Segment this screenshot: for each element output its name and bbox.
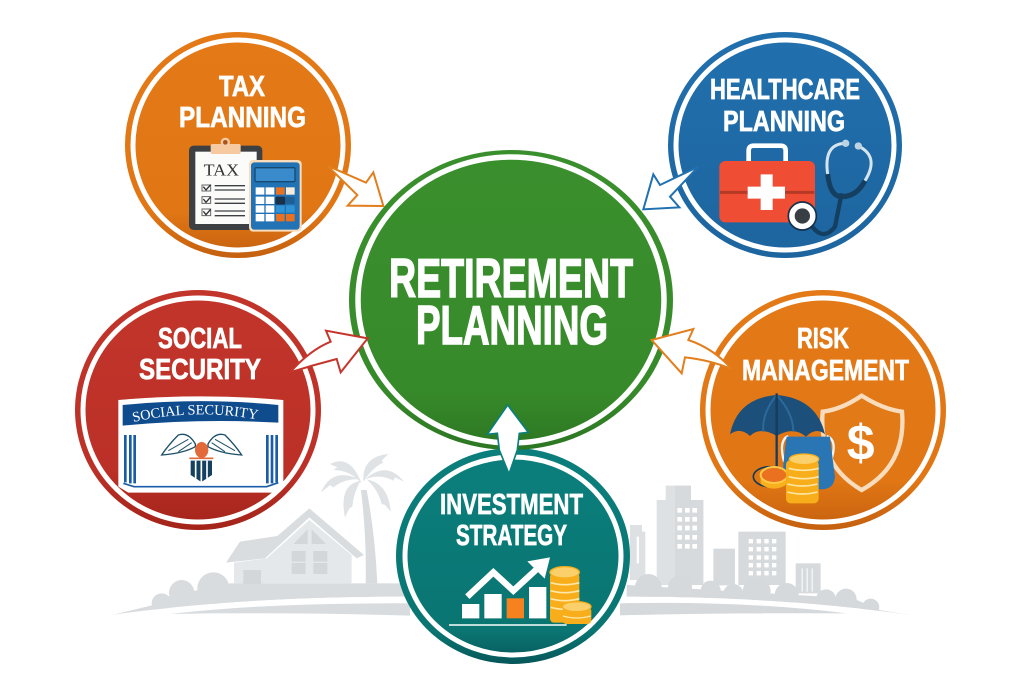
- icon: clipboard and calculator: TAX: [204, 160, 239, 179]
- investment heading: INVESTMENT: [440, 489, 583, 521]
- healthcare heading: HEALTHCARE: [710, 74, 860, 106]
- infographic canvas: [75, 32, 946, 664]
- tax heading: TAX: [219, 71, 266, 103]
- buildings: [630, 486, 821, 593]
- icon: first aid kit and stethoscope: [719, 140, 871, 234]
- investment circle: [396, 448, 630, 664]
- house: [226, 508, 364, 584]
- risk heading: MANAGEMENT: [742, 355, 909, 387]
- arrow: social security to center: [290, 331, 368, 372]
- background: house, palm and hills: [112, 454, 410, 616]
- investment heading: STRATEGY: [456, 520, 567, 552]
- central heading: RETIREMENT: [389, 247, 633, 309]
- investment heading: [440, 489, 583, 552]
- panel: healthcare planning: [668, 32, 902, 258]
- panel: investment strategy: [396, 448, 630, 664]
- panel: social security: [75, 290, 321, 530]
- icon: growth chart and coins: [449, 557, 591, 625]
- palm tree: [321, 454, 404, 583]
- background: city skyline: [620, 486, 909, 617]
- arrow: tax to center: [327, 166, 383, 206]
- risk heading: [742, 323, 909, 387]
- central heading: PLANNING: [416, 294, 608, 356]
- icon: social security card: [118, 396, 284, 493]
- arrow: investment to center: [487, 405, 528, 474]
- healthcare heading: PLANNING: [723, 106, 845, 138]
- arrow: healthcare to center: [643, 167, 698, 209]
- building windows: [637, 508, 813, 592]
- healthcare circle: [668, 32, 902, 258]
- arrow: risk management to center: [652, 329, 732, 373]
- tax circle: [125, 32, 351, 258]
- tax heading: [179, 71, 306, 134]
- healthcare heading: [710, 74, 860, 138]
- hills and ground left: [112, 572, 410, 616]
- risk heading: RISK: [797, 323, 849, 355]
- panel: tax planning: [125, 32, 351, 258]
- icon: social security card: SOCIAL SECURITY: [132, 404, 259, 422]
- central circle: [349, 150, 673, 450]
- social security heading: SECURITY: [139, 354, 261, 386]
- social security circle: [75, 290, 321, 530]
- hills and ground right: [620, 574, 909, 617]
- panel: retirement planning: [349, 150, 673, 450]
- icon: clipboard and calculator: [189, 138, 302, 232]
- panel: risk management: [700, 290, 946, 530]
- social security heading: [139, 323, 261, 386]
- social security heading: SOCIAL: [158, 323, 242, 355]
- icon: umbrella, shield and coins: [730, 393, 902, 503]
- tax heading: PLANNING: [179, 102, 306, 134]
- risk circle: [700, 290, 946, 530]
- central heading: [389, 247, 633, 356]
- icon: umbrella, shield and coins: $: [847, 415, 875, 471]
